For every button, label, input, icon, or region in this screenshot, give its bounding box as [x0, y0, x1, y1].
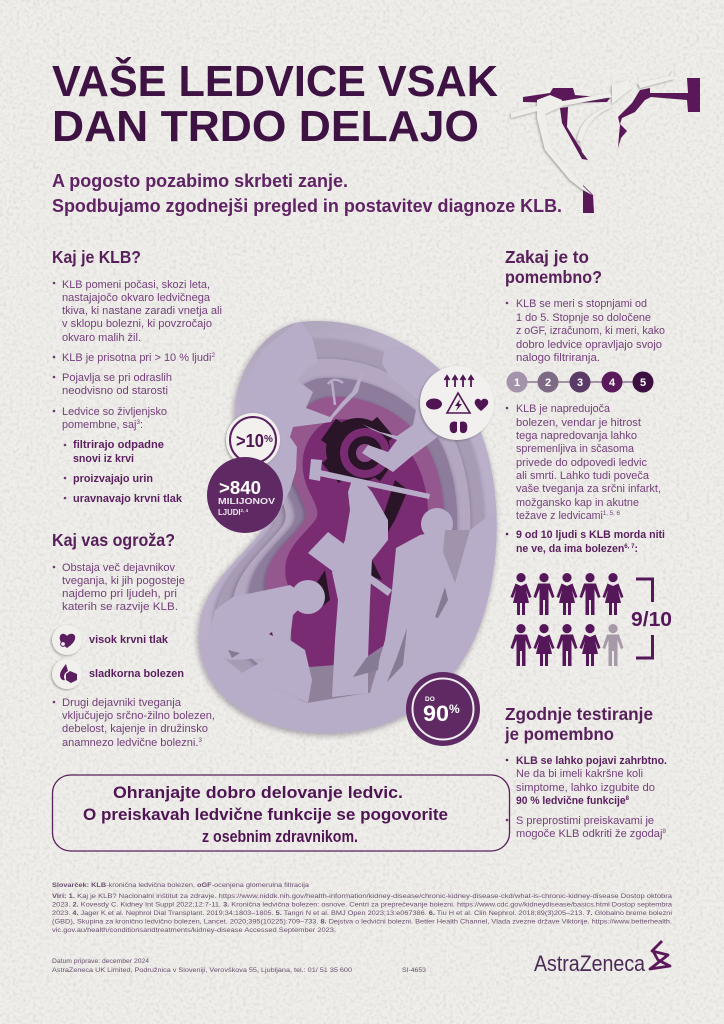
text block: risk factors: najdemo pri ljudeh, pri: [62, 588, 177, 600]
stat: up to 90%: [406, 672, 480, 746]
gear: [312, 417, 408, 612]
text block: KLB definition: uravnavajo krvni tlak: [73, 493, 183, 505]
lower purple windows: [290, 540, 392, 668]
warning triangle: [447, 393, 470, 413]
title: VAŠE LEDVICE VSAK: [52, 55, 498, 106]
heading: Kaj vas ogroža?: Kaj vas ogroža?: [52, 530, 175, 550]
icon: heart blood pressure: [52, 625, 82, 655]
text block: KLB definition: proizvajajo urin: [73, 473, 153, 485]
heading: Zgodnje testiranje je pomembno: je pomembno: [504, 724, 614, 744]
text block: progression: bolezen, vendar je hitrost: [516, 417, 642, 429]
text block: KLB definition: :: [140, 419, 143, 431]
references: [52, 893, 673, 934]
pictogram: 9 of 10 people: [510, 573, 624, 666]
text block: early testing: KLB se lahko pojavi zahrbtno.: [516, 755, 667, 767]
text block: KLB definition: neodvisno od starosti: [62, 385, 168, 397]
text block: progression: ne ve, da ima bolezen: [516, 543, 631, 555]
text block: stages: 1 do 5. Stopnje so določene: [516, 312, 651, 324]
text block: progression: težave z ledvicami: [516, 510, 607, 522]
text block: other risk factors: 3: [198, 737, 202, 744]
heading: Zakaj je to pomembno?: Zakaj je to: [505, 247, 589, 267]
title: [52, 55, 498, 151]
text block: KLB definition: Pojavlja se pri odraslih: [62, 372, 172, 384]
references: (GBD), Skupina za kronično ledvično bolezen, Lancet. 2020;395(10225):709–733. 8. Dejstva o ledvični bolezni. Better Health Channel, Vlada zvezne države Viktorije. https://www.betterhealth.: [52, 918, 672, 926]
references: 2023. 4. Jager K et al. Nephrol Dial Transplant. 2019;34:1803–1805. 5. Tangri N et al. BMJ Open 2023;13:e067386. 6. Tiu H et al. Clin Nephrol. 2018;89(3)205–213. 7. Globalno breme bolezni: [52, 910, 673, 917]
title: DAN TRDO DELAJO: [52, 102, 479, 151]
slits: [228, 530, 470, 682]
text block: KLB definition: KLB pomeni počasi, skozi leta,: [62, 279, 210, 291]
text block: KLB definition: filtrirajo odpadne: [73, 439, 164, 451]
stat: up to 90%: DO: [425, 696, 435, 703]
illustration: paper-cut kidney with workers: [190, 320, 510, 745]
text block: KLB definition: pomembne, saj: [62, 419, 138, 431]
subtitle: [52, 170, 562, 216]
text block: other risk factors: anamnezo ledvične bolezni.: [62, 737, 200, 749]
preparation date and address: Datum priprave: december 2024: [52, 958, 149, 965]
stat: >840 million: >840: [219, 478, 261, 498]
stat: >840 million: [207, 457, 283, 533]
text block: stages: [506, 298, 665, 364]
subtitle: Spodbujamo zgodnejši pregled in postavitev diagnoze KLB.: [52, 195, 562, 216]
text block: KLB definition: snovi iz krvi: [73, 453, 134, 465]
text block: risk factors: tveganja, ki jih pogosteje: [62, 575, 185, 587]
text block: early testing: simptome, lahko izgubite do: [516, 782, 655, 794]
rising arrows: [444, 376, 474, 387]
stat: up to 90%: 90: [423, 701, 449, 726]
silhouettes: [212, 322, 497, 731]
text block: early testing: 8: [662, 828, 666, 835]
references: 2023. 2. Kovesdy C. Kidney Int Suppl 2022;12:7-11. 3. Kronična ledvična bolezen: osnove. Centri za preprečevanje bolezni. https://www.cdc.gov/kidneydisease/basics.html Dostop septembra: [52, 902, 672, 908]
stat: >10%: >10: [236, 431, 264, 451]
callout: talk to your doctor: Ohranjajte dobro delovanje ledvic.: [113, 784, 403, 802]
text block: KLB definition: 2: [211, 352, 215, 359]
text block: KLB definition: nastajajočo okvaro ledvičnega: [62, 292, 211, 304]
icon circle: organs at risk: [420, 366, 494, 440]
stages 1 to 5: 1: [514, 377, 520, 389]
heading: Kaj je KLB?: Kaj je KLB?: [52, 247, 141, 267]
heading: Zgodnje testiranje je pomembno: [504, 704, 653, 744]
stat: >10%: %: [264, 434, 273, 445]
stages 1 to 5: [506, 372, 654, 392]
stat: >840 million: MILIJONOV: [218, 497, 276, 506]
bracket and 9/10 label: 9/10: [631, 609, 672, 631]
text block: other risk factors: Drugi dejavniki tveganja: [62, 697, 182, 709]
heading: Zgodnje testiranje je pomembno: Zgodnje testiranje: [505, 704, 653, 724]
text block: stages: dobro ledvice opravljajo svojo: [516, 339, 662, 351]
text block: progression: 6, 7: [624, 543, 635, 550]
text block: other risk factors: debelost, kajenje in družinsko: [62, 723, 208, 735]
callout: talk to your doctor: z osebnim zdravnikom.: [202, 828, 358, 846]
brain: [426, 398, 442, 410]
heart: [475, 399, 488, 411]
text block: KLB definition: [53, 279, 222, 505]
stat: >10%: [226, 413, 280, 467]
references: Viri: 1. Kaj je KLB? Nacionalni inštitut za zdravje. https://www.niddk.nih.gov/health-information/kidney-disease/chronic-kidney-disease-ckd/what-is-chronic-kidney-disease Dostop oktobra: [52, 893, 672, 900]
text block: progression: :: [634, 543, 638, 555]
text block: KLB definition: okvaro malih žil.: [62, 332, 141, 344]
stages 1 to 5: 2: [545, 377, 551, 389]
text block: stages: KLB se meri s stopnjami od: [516, 298, 647, 310]
preparation date and address: AstraZeneca UK Limited, Podružnica v Sloveniji, Verovškova 55, Ljubljana, tel.: 01/ 51 35 600: [52, 967, 352, 974]
text block: KLB definition: tkiva, ki nastane zaradi vnetja ali: [62, 305, 222, 317]
stages 1 to 5: 3: [577, 377, 583, 389]
text block: progression: možgansko kap in akutne: [516, 497, 639, 509]
text block: progression: spremenljiva in sčasoma: [516, 443, 635, 455]
text block: stages: z oGF, izračunom, ki meri, kako: [516, 325, 665, 337]
text block: early testing: Ne da bi imeli kakršne koli: [516, 768, 643, 780]
text block: progression: KLB je napredujoča: [516, 403, 611, 415]
text block: early testing: 8: [626, 795, 629, 802]
text block: progression: tega napredovanja lahko: [516, 430, 637, 442]
bracket and 9/10 label: [631, 579, 672, 658]
text block: risk factors: Obstaja več dejavnikov: [62, 562, 175, 574]
glossary: Slovarček: KLB -kronična ledvična bolezen, oGF-ocenjena glomerulna filtracija: [52, 882, 309, 889]
stat: >840 million: 2, 4: [241, 508, 249, 513]
text block: progression: 1, 5, 6: [603, 510, 620, 517]
text block: KLB definition: KLB je prisotna pri > 10 % ljudi: [62, 352, 215, 364]
text block: progression: vaše tveganja za srčni infarkt,: [516, 483, 661, 495]
text block: early testing: mogoče KLB odkriti že zgodaj: [516, 828, 664, 840]
stat: >840 million: LJUDI: [218, 508, 241, 517]
text block: progression: ali smrti. Lahko tudi poveča: [516, 470, 650, 482]
callout: talk to your doctor: O preiskavah ledvične funkcije se pogovorite: [83, 806, 448, 824]
stat: up to 90%: %: [449, 702, 460, 716]
icon: diabetes drop and sugar: [52, 659, 82, 689]
text block: progression: [506, 403, 665, 555]
text block: KLB definition: v sklopu bolezni, ki povzročajo: [62, 318, 212, 330]
label: diabetes: sladkorna bolezen: [89, 668, 184, 680]
illustration: paper-cut hammer worker: [511, 70, 700, 213]
text block: early testing: S preprostimi preiskavami je: [516, 815, 654, 827]
document code: SI-4653: [402, 967, 426, 974]
logo: AstraZeneca: [534, 941, 670, 976]
text block: stages: nalogo filtriranja.: [516, 352, 600, 364]
subtitle: A pogosto pozabimo skrbeti zanje.: [52, 170, 348, 191]
text block: early testing: 90 % ledvične funkcije: [516, 795, 635, 807]
text block: risk factors: katerih se razvije KLB.: [62, 601, 178, 613]
text block: KLB definition: 3: [136, 419, 140, 426]
stages 1 to 5: 4: [609, 377, 616, 389]
heading: Zakaj je to pomembno?: [505, 247, 602, 287]
text block: other risk factors: [53, 697, 215, 749]
kidneys: [450, 422, 467, 433]
text block: early testing: [506, 755, 667, 840]
references: vic.gov.au/health/conditionsandtreatments/kidney-disease Accessed September 2023.: [52, 927, 336, 934]
text block: other risk factors: vključujejo srčno-žilno bolezen,: [62, 710, 215, 722]
text block: progression: 9 od 10 ljudi s KLB morda niti: [516, 529, 665, 541]
logo: AstraZeneca: AstraZeneca: [534, 951, 645, 976]
preparation date and address: [52, 958, 352, 974]
label: high blood pressure: visok krvni tlak: [89, 634, 169, 646]
callout: talk to your doctor: [52, 775, 510, 851]
text block: risk factors: [53, 562, 185, 613]
stages 1 to 5: 5: [640, 377, 646, 389]
small hammer: [328, 380, 343, 405]
text block: progression: privede do odpovedi ledvic: [516, 457, 647, 469]
heading: Zakaj je to pomembno?: pomembno?: [505, 267, 602, 287]
text block: KLB definition: Ledvice so življenjsko: [62, 406, 167, 418]
